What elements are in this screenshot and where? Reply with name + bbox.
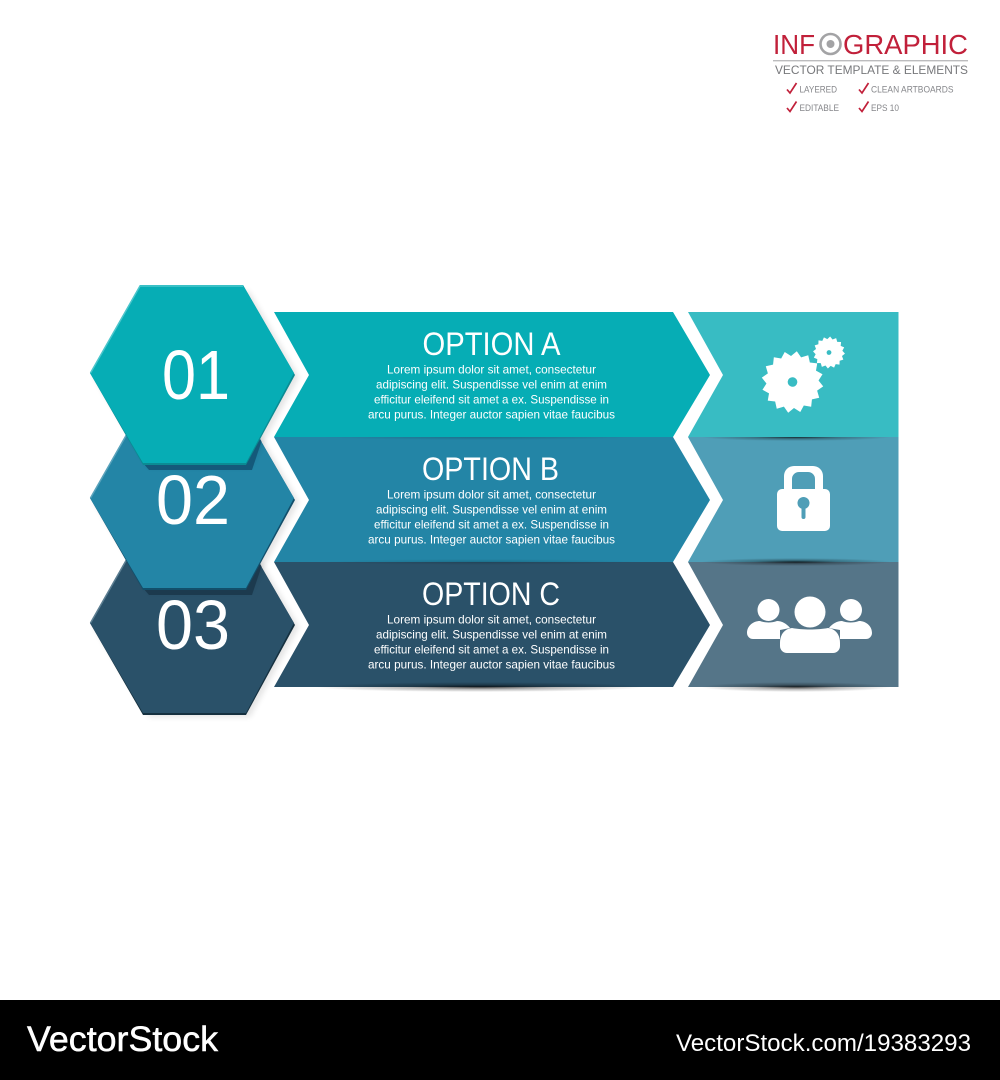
hexagon 03 (90, 535, 299, 717)
option B body text: arcu purus. Integer auctor sapien vitae faucibus (368, 532, 615, 546)
option A body text: arcu purus. Integer auctor sapien vitae faucibus (368, 408, 615, 422)
option C body text (368, 612, 615, 672)
panel: option B arrow (274, 437, 710, 562)
logo wordmark (773, 29, 968, 60)
panel: option A arrow (274, 312, 710, 437)
option B heading: OPTION B (422, 451, 559, 487)
icon: large gear (757, 347, 828, 417)
option A body text: adipiscing elit. Suspendisse vel enim at enim (376, 378, 607, 392)
logo checklist: CLEAN ARTBOARDS (871, 84, 954, 94)
footer url: VectorStock.com/19383293 (676, 1030, 971, 1057)
logo wordmark: GRAPHIC (843, 29, 968, 60)
hexagon 01 (90, 285, 299, 470)
hexagon 01 cast shadow on 02 (145, 439, 262, 470)
footer logo: VectorStock (27, 1020, 219, 1059)
footer bar (0, 1000, 1000, 1080)
logo checklist: LAYERED (800, 84, 837, 94)
panel: icon tile C with people (688, 562, 898, 687)
header logo (773, 29, 968, 113)
hexagon 02 cast shadow on 03 (145, 564, 262, 595)
panel: option C arrow (274, 562, 710, 687)
option A body text: Lorem ipsum dolor sit amet, consectetur (387, 362, 596, 376)
option C body text: adipiscing elit. Suspendisse vel enim at enim (376, 628, 607, 642)
logo subtitle: VECTOR TEMPLATE & ELEMENTS (775, 63, 968, 77)
panel: icon tile B with padlock (688, 437, 898, 562)
logo checklist (787, 83, 954, 113)
icon: group of people (747, 596, 872, 653)
logo wordmark: INF (773, 29, 815, 60)
number 03: 03 (156, 586, 230, 664)
row drop shadows (315, 433, 891, 692)
option B body text: efficitur eleifend sit amet a ex. Suspendisse in (374, 518, 609, 532)
number 01: 01 (162, 336, 230, 414)
option C heading: OPTION C (422, 576, 560, 612)
option C body text: efficitur eleifend sit amet a ex. Suspendisse in (374, 642, 609, 656)
option B body text (368, 488, 615, 546)
number 02: 02 (156, 461, 230, 539)
option C body text: Lorem ipsum dolor sit amet, consectetur (387, 612, 596, 626)
panel: icon tile A with gears (688, 312, 898, 437)
icon: small gear (812, 335, 846, 370)
option C body text: arcu purus. Integer auctor sapien vitae faucibus (368, 658, 615, 672)
option A heading: OPTION A (422, 326, 561, 362)
icon: padlock (777, 466, 830, 531)
logo checklist: EDITABLE (800, 103, 839, 113)
hexagon 02 (90, 434, 299, 595)
logo target icon (820, 34, 840, 54)
option A body text: efficitur eleifend sit amet a ex. Suspendisse in (374, 392, 609, 406)
option B body text: Lorem ipsum dolor sit amet, consectetur (387, 488, 596, 502)
option B body text: adipiscing elit. Suspendisse vel enim at enim (376, 502, 607, 516)
option A body text (368, 362, 615, 422)
logo checklist: EPS 10 (871, 103, 899, 113)
